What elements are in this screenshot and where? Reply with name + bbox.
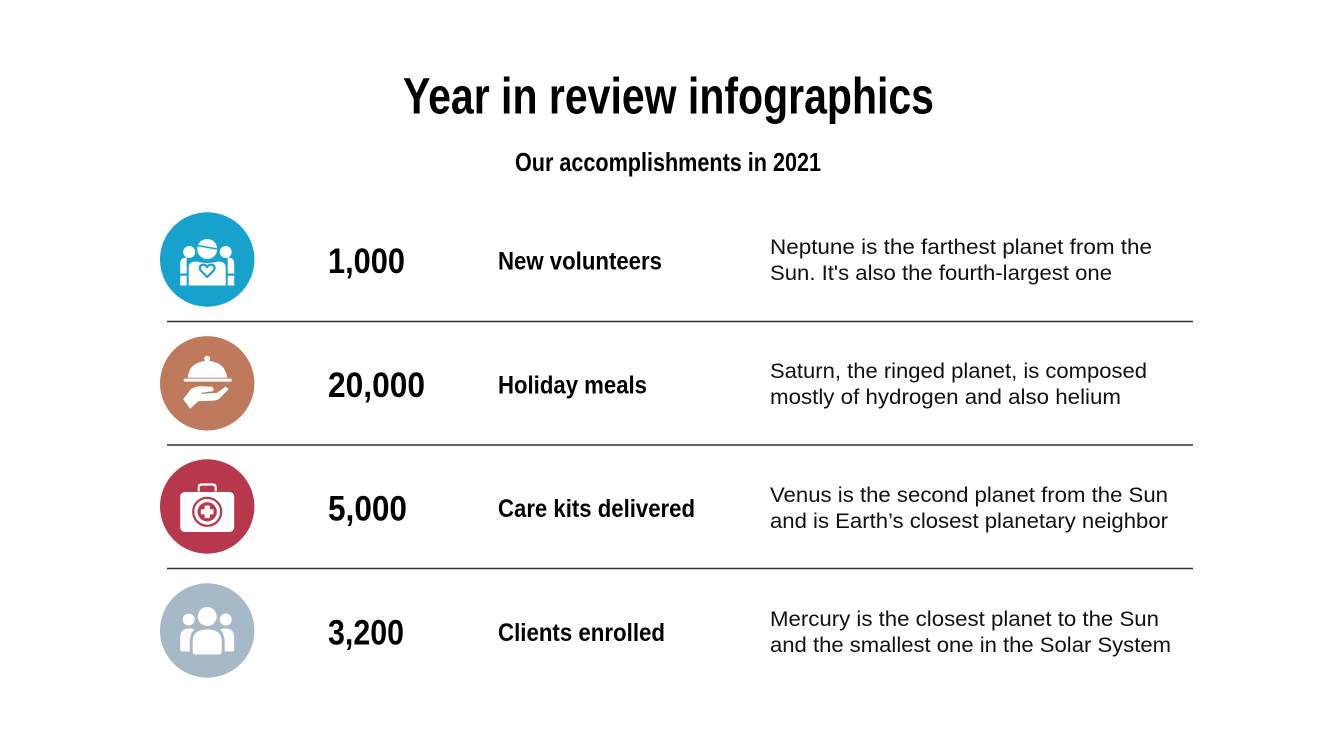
- description: Saturn: Saturn, the ringed planet, is composed: [770, 359, 1147, 383]
- icon: group of people: [160, 583, 254, 678]
- title: Year in review infographics: [403, 68, 934, 124]
- row: new volunteers: [160, 212, 1152, 307]
- label: holiday meals: Holiday meals: [498, 372, 647, 400]
- description: Neptune: Neptune is the farthest planet from the: [770, 235, 1152, 259]
- description: Mercury: Mercury is the closest planet to the Sun: [770, 607, 1159, 631]
- subtitle: Our accomplishments in 2021: [515, 147, 821, 177]
- value: 5,000: 5,000: [328, 490, 407, 528]
- description: Venus: and is Earth’s closest planetary neighbor: [770, 509, 1168, 533]
- label: new volunteers: New volunteers: [498, 248, 662, 276]
- row: clients enrolled: [160, 583, 1171, 678]
- icon: serving cloche and hand: [160, 336, 254, 430]
- value: 20,000: 20,000: [328, 366, 425, 405]
- description: Neptune: Sun. It's also the fourth-largest one: [770, 261, 1112, 285]
- description: Saturn: [770, 359, 1147, 409]
- row: care kits delivered: [160, 459, 1168, 554]
- description: Saturn: mostly of hydrogen and also helium: [770, 385, 1121, 409]
- icon: first aid kit: [160, 459, 254, 554]
- description: Venus: Venus is the second planet from the Sun: [770, 483, 1168, 507]
- description: Mercury: and the smallest one in the Solar System: [770, 633, 1171, 657]
- description: Mercury: [770, 607, 1171, 657]
- value: 3,200: 3,200: [328, 614, 404, 652]
- label: clients enrolled: Clients enrolled: [498, 619, 665, 647]
- value: 1,000: 1,000: [328, 242, 405, 281]
- description: Venus: [770, 483, 1168, 533]
- label: care kits delivered: Care kits delivered: [498, 495, 695, 523]
- description: Neptune: [770, 235, 1152, 285]
- icon: volunteers: [160, 212, 254, 307]
- row: holiday meals: [160, 336, 1147, 430]
